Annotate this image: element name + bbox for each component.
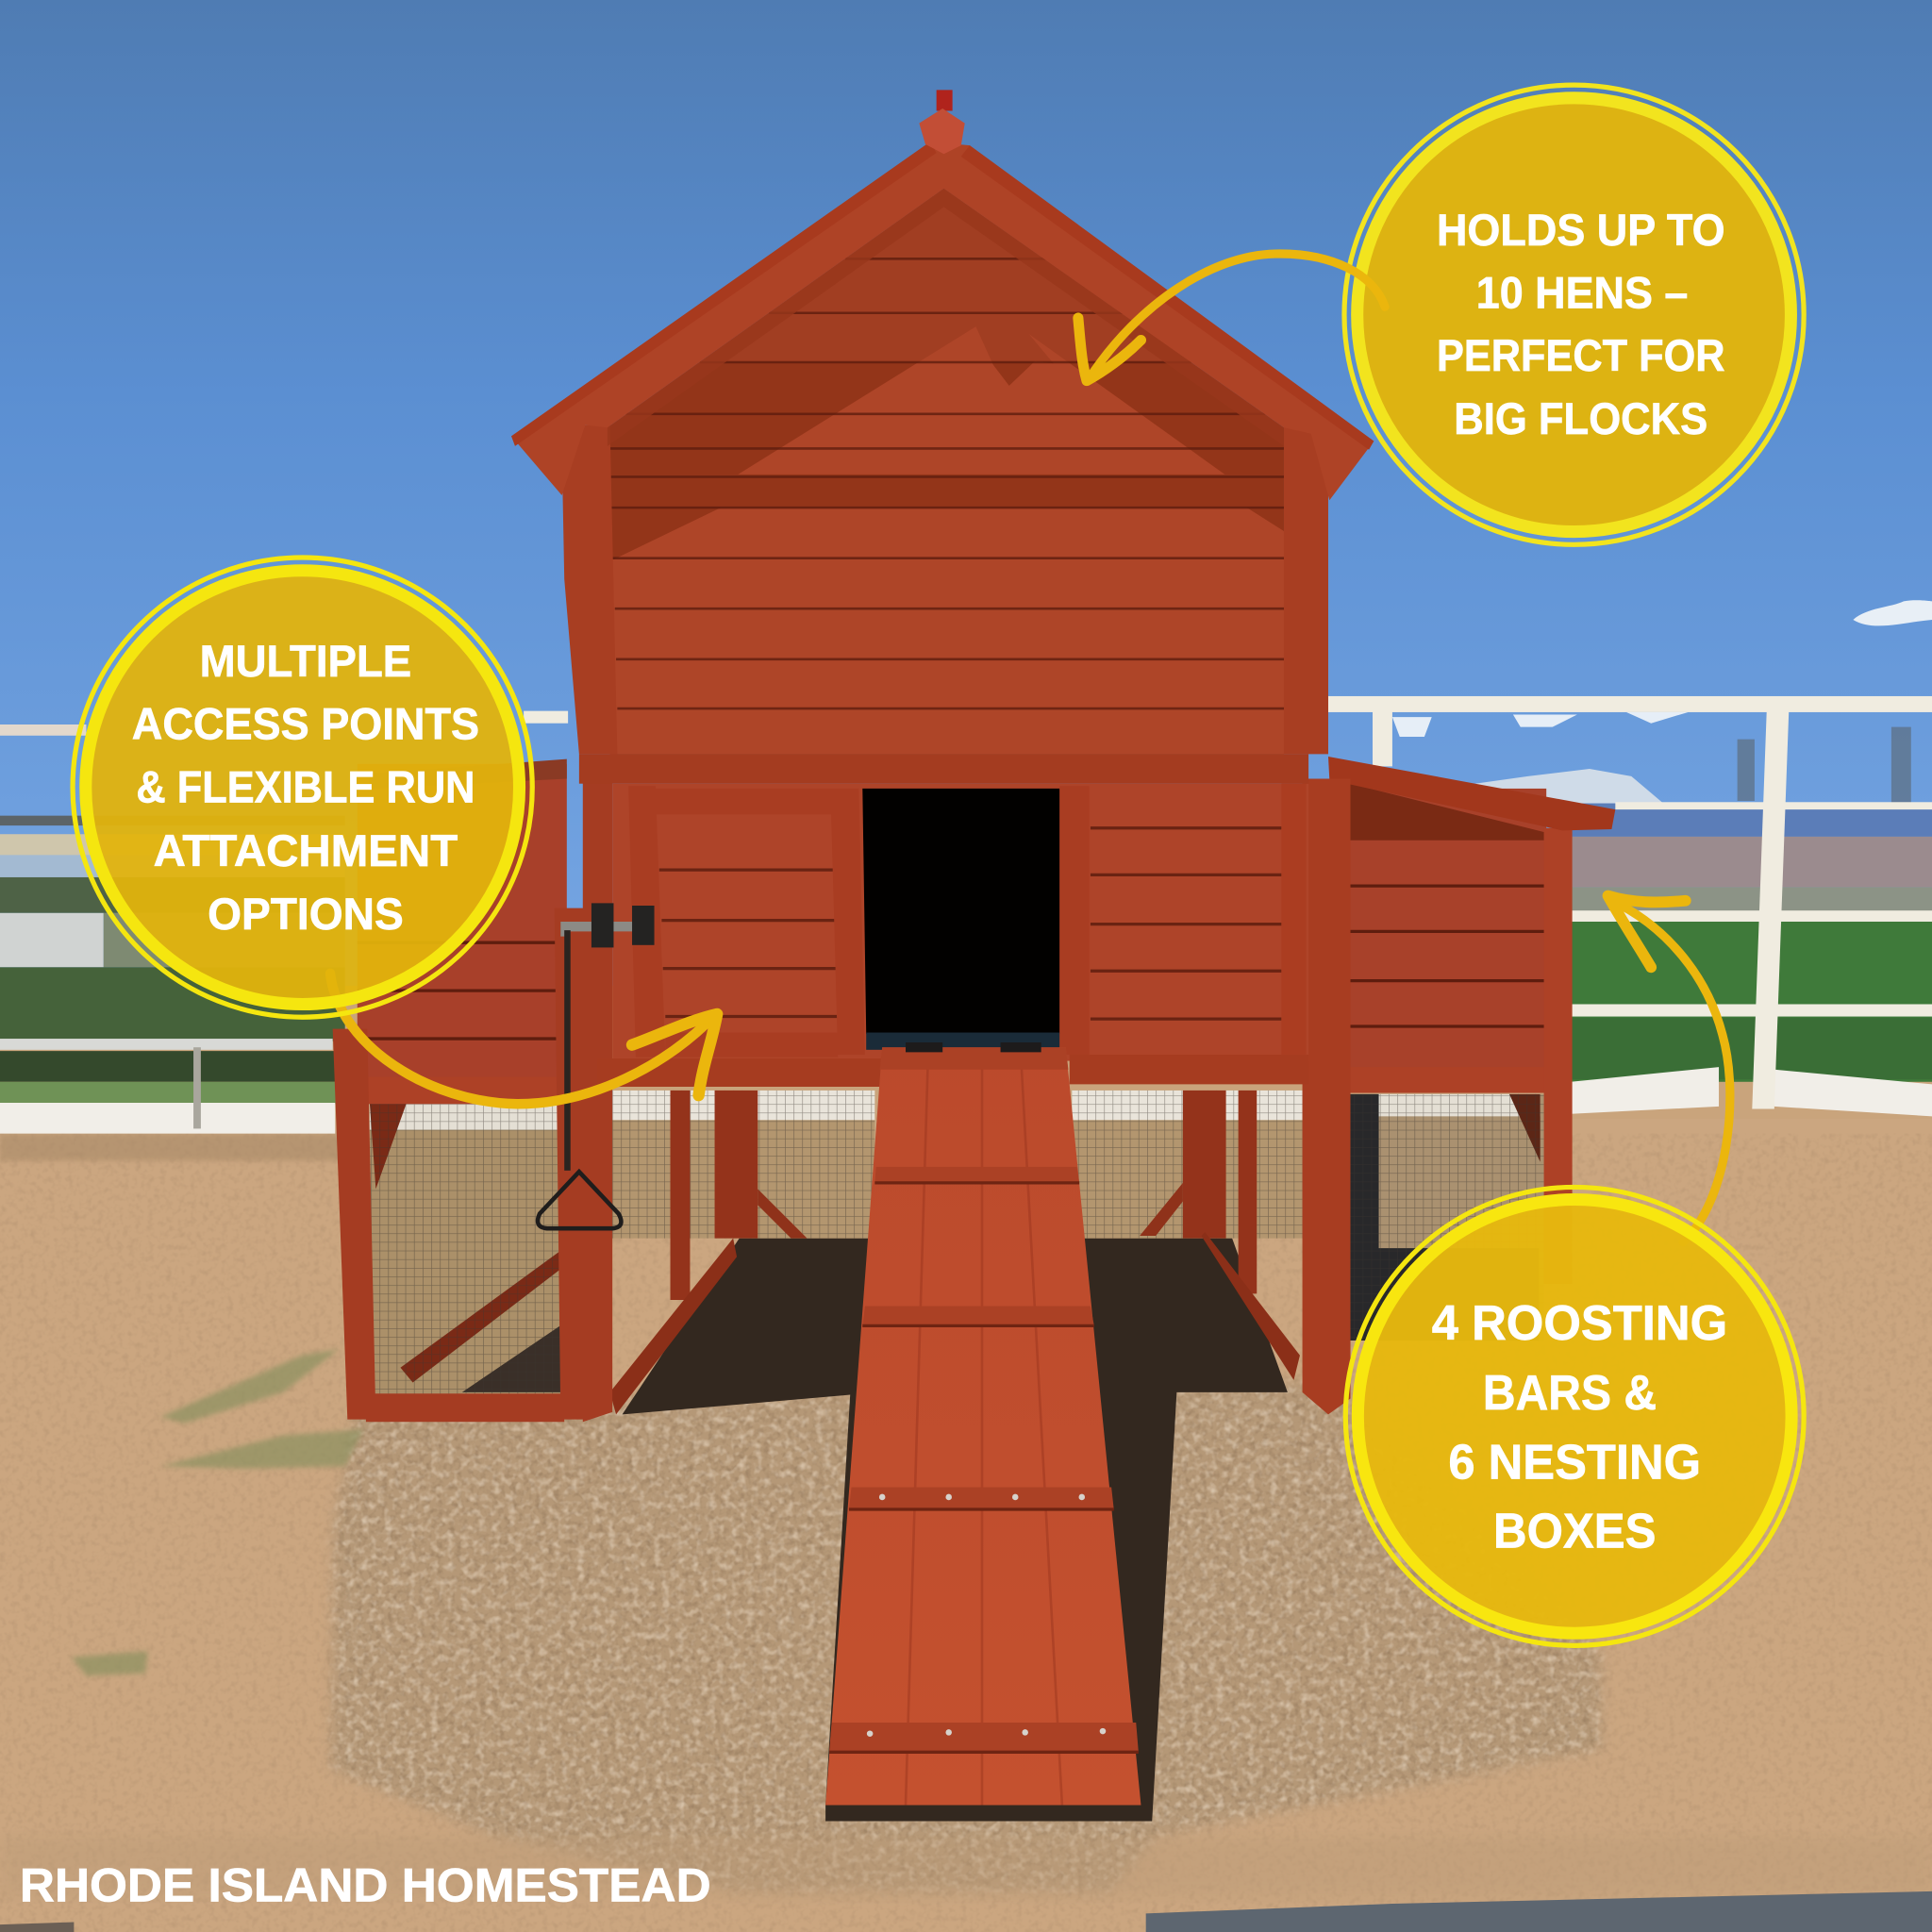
callout: holds up to 10 hens: PERFECT FOR	[1437, 330, 1725, 380]
fascia and soffit	[511, 142, 1374, 500]
ground shadow under coop	[623, 1239, 1288, 1821]
upper wall with gable	[608, 189, 1284, 754]
bottom dirt strip	[0, 1836, 1932, 1897]
small clouds	[1392, 712, 1688, 737]
right run wire panel	[1349, 1094, 1544, 1341]
inner trim	[608, 189, 1284, 446]
lower wall	[612, 784, 1308, 1061]
grass patches	[72, 1349, 363, 1675]
right nest box	[1349, 784, 1573, 1284]
shingle edge	[511, 142, 1374, 450]
lower belt rail	[597, 1055, 1308, 1087]
sky	[0, 0, 1932, 986]
callout: multiple access points	[73, 558, 717, 1104]
gravel	[326, 1377, 1606, 1892]
roof finial	[919, 90, 965, 154]
under-coop mesh and legs	[610, 1091, 1306, 1414]
wall shaded base	[608, 189, 1284, 754]
arrow to side door	[330, 974, 717, 1104]
far landscape left	[0, 816, 345, 1104]
roof	[511, 142, 1374, 500]
dark foreground edge	[1146, 1891, 1932, 1932]
sand texture	[0, 1134, 1932, 1932]
callout: multiple access points: OPTIONS	[208, 889, 404, 939]
cloud right	[1853, 600, 1932, 625]
callout: holds up to 10 hens: 10 HENS –	[1476, 268, 1688, 318]
ramp plank seams	[906, 1066, 1062, 1805]
plank seams	[610, 258, 1284, 708]
upper corner posts	[562, 413, 1328, 754]
left door frame	[628, 786, 865, 1058]
arrow to coop gable	[1078, 254, 1385, 381]
callout: multiple access points: MULTIPLE	[200, 636, 411, 686]
right corner post	[1303, 778, 1351, 1414]
far landscape right	[1474, 727, 1932, 1082]
ramp hinges	[906, 1042, 1041, 1052]
callout: holds up to 10 hens: HOLDS UP TO	[1437, 205, 1725, 255]
ramp	[825, 1042, 1141, 1805]
callout: roosting bars and nesting boxes: 4 ROOSTING	[1432, 1296, 1727, 1351]
arrow to nest box	[1607, 896, 1730, 1242]
callout: roosting bars and nesting boxes	[1345, 896, 1804, 1645]
ground	[0, 1119, 1932, 1932]
callout: roosting bars and nesting boxes: BOXES	[1493, 1504, 1656, 1558]
sunlit triangle	[738, 326, 1224, 475]
far ground strip	[0, 1134, 358, 1160]
slat screws	[867, 1494, 1106, 1737]
callout: multiple access points: & FLEXIBLE RUN	[136, 761, 475, 811]
brand name footer: RHODE ISLAND HOMESTEAD	[20, 1858, 711, 1911]
left run frame	[333, 764, 612, 1422]
gable top tone	[700, 189, 1191, 362]
slat shadow edges	[829, 1183, 1139, 1752]
callout: roosting bars and nesting boxes: 6 NESTING	[1448, 1435, 1701, 1490]
callout: holds up to 10 hens	[1078, 85, 1804, 544]
ramp cross slats	[829, 1047, 1139, 1752]
fence	[0, 696, 1932, 1128]
right door post	[1059, 786, 1090, 1055]
white curb	[0, 1067, 1932, 1134]
left run wire panel	[370, 1103, 564, 1398]
callout: holds up to 10 hens: BIG FLOCKS	[1454, 393, 1707, 443]
chicken coop	[333, 90, 1615, 1422]
callout: multiple access points: ACCESS POINTS	[132, 699, 479, 749]
sunlit lower wall	[610, 508, 1284, 754]
callout: roosting bars and nesting boxes: BARS &	[1483, 1366, 1657, 1421]
dark door opening	[862, 789, 1059, 1050]
door latch and pull handle	[538, 903, 655, 1228]
upper belt rail	[579, 754, 1308, 784]
left nest box	[358, 759, 567, 1104]
right nest box roof	[1328, 757, 1615, 830]
callout: multiple access points: ATTACHMENT	[154, 825, 458, 875]
